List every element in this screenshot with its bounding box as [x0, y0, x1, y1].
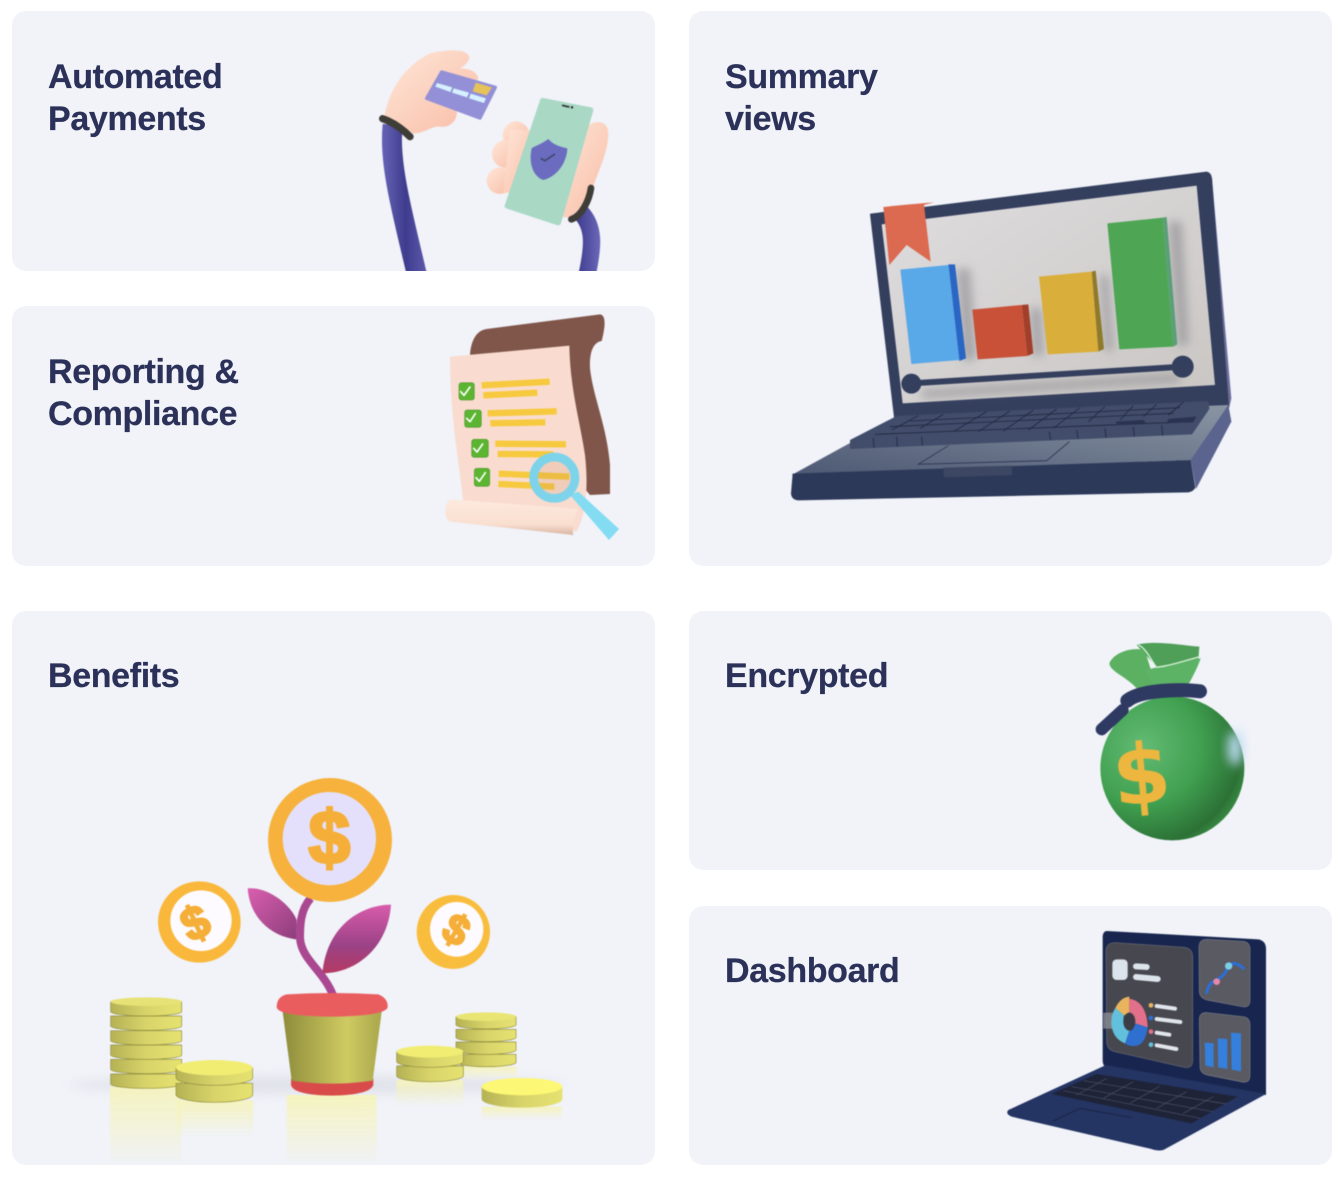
check marks — [461, 387, 485, 481]
heading: Summary views: Summary — [725, 58, 878, 96]
right arm — [580, 212, 592, 277]
left hand — [385, 50, 478, 133]
main glass panel — [1106, 943, 1193, 1068]
illustration: green money bag — [1094, 642, 1248, 842]
heading: Summary views: views — [725, 100, 816, 138]
screen — [882, 186, 1215, 403]
bar shadows — [920, 222, 1188, 398]
red bar — [972, 304, 1033, 359]
rope — [1102, 690, 1200, 729]
coin pair left — [176, 1060, 253, 1102]
right wrist ring — [571, 188, 591, 219]
panel: Dashboard — [689, 906, 1332, 1165]
panel: Encrypted — [689, 611, 1332, 870]
left coin: $ — [172, 894, 218, 952]
bottom-right glass panel — [1199, 1013, 1250, 1082]
base — [1007, 1065, 1266, 1150]
lid — [1103, 931, 1266, 1095]
lid frame — [871, 172, 1228, 420]
side edge — [1191, 405, 1231, 489]
single coin — [482, 1078, 562, 1108]
right coin — [417, 895, 490, 969]
heading: Summary views — [725, 58, 878, 138]
trackpad — [918, 442, 1069, 464]
lid edge — [1207, 173, 1231, 412]
glass tab beside donut — [1103, 1013, 1121, 1029]
keyboard — [850, 401, 1209, 449]
heading: Reporting & Compliance: Compliance — [48, 394, 237, 432]
heading: Reporting & Compliance — [48, 352, 239, 432]
heading: Reporting & Compliance: Reporting & — [48, 352, 239, 390]
phone — [507, 101, 591, 223]
panel: Reporting & Compliance — [12, 306, 655, 566]
bottom roll — [445, 499, 578, 535]
yellow bar — [1039, 271, 1104, 354]
legend — [1149, 1003, 1180, 1049]
front edge — [791, 460, 1195, 500]
left leaf — [248, 888, 297, 939]
heading: Automated Payments — [48, 58, 222, 138]
coin pair right — [397, 1046, 463, 1082]
bag body — [1100, 696, 1244, 840]
bar chart — [1205, 1033, 1241, 1071]
keyboard — [1052, 1074, 1237, 1123]
stem — [300, 898, 333, 996]
bookmark — [883, 202, 934, 265]
panel: Benefits — [12, 611, 655, 1165]
reflections — [110, 1067, 562, 1167]
trackpad — [1053, 1108, 1132, 1121]
illustration: dark laptop with dashboard — [1006, 930, 1267, 1152]
left coin — [158, 881, 241, 963]
dollar sign: $ — [1108, 724, 1175, 826]
heading: Benefits: Benefits — [48, 656, 179, 694]
illustration: checklist scroll with magnifier — [445, 314, 620, 540]
heading: Dashboard: Dashboard — [725, 952, 899, 990]
right leaf — [322, 905, 391, 973]
highlight — [1228, 731, 1242, 766]
green bar — [1107, 217, 1177, 349]
donut chart — [1111, 997, 1148, 1046]
left arm — [392, 125, 417, 277]
floor shadow — [70, 1076, 563, 1094]
credit card — [427, 72, 495, 118]
deck — [792, 405, 1231, 475]
thumb notch — [943, 466, 1012, 477]
bag neck — [1109, 643, 1201, 688]
paper — [450, 346, 587, 532]
magnifier — [534, 457, 619, 540]
right hand — [487, 121, 608, 218]
heading: Automated Payments: Payments — [48, 100, 206, 138]
avatar and label lines — [1112, 959, 1158, 980]
large coin — [268, 778, 392, 902]
illustration: hands with card and phone — [378, 50, 609, 271]
checkboxes — [459, 383, 490, 486]
coin stack right — [456, 1012, 516, 1067]
large coin: $ — [308, 795, 350, 879]
pot — [277, 993, 388, 1096]
top-right glass panel — [1199, 939, 1250, 1007]
brown back sheet — [470, 314, 610, 495]
line chart — [1207, 962, 1243, 993]
panel: Automated Payments — [12, 11, 655, 271]
illustration: laptop with bar chart — [790, 170, 1232, 502]
wrist ring — [383, 119, 410, 137]
illustration: money plant and coins — [90, 777, 564, 1158]
heading: Automated Payments: Automated — [48, 58, 222, 96]
yellow text lines — [482, 382, 569, 487]
slider — [901, 356, 1194, 394]
panel: Summary views — [689, 11, 1332, 566]
coin stack left — [111, 997, 182, 1088]
blue bar — [900, 264, 966, 364]
heading: Encrypted: Encrypted — [725, 656, 888, 694]
right coin: $ — [435, 903, 478, 956]
